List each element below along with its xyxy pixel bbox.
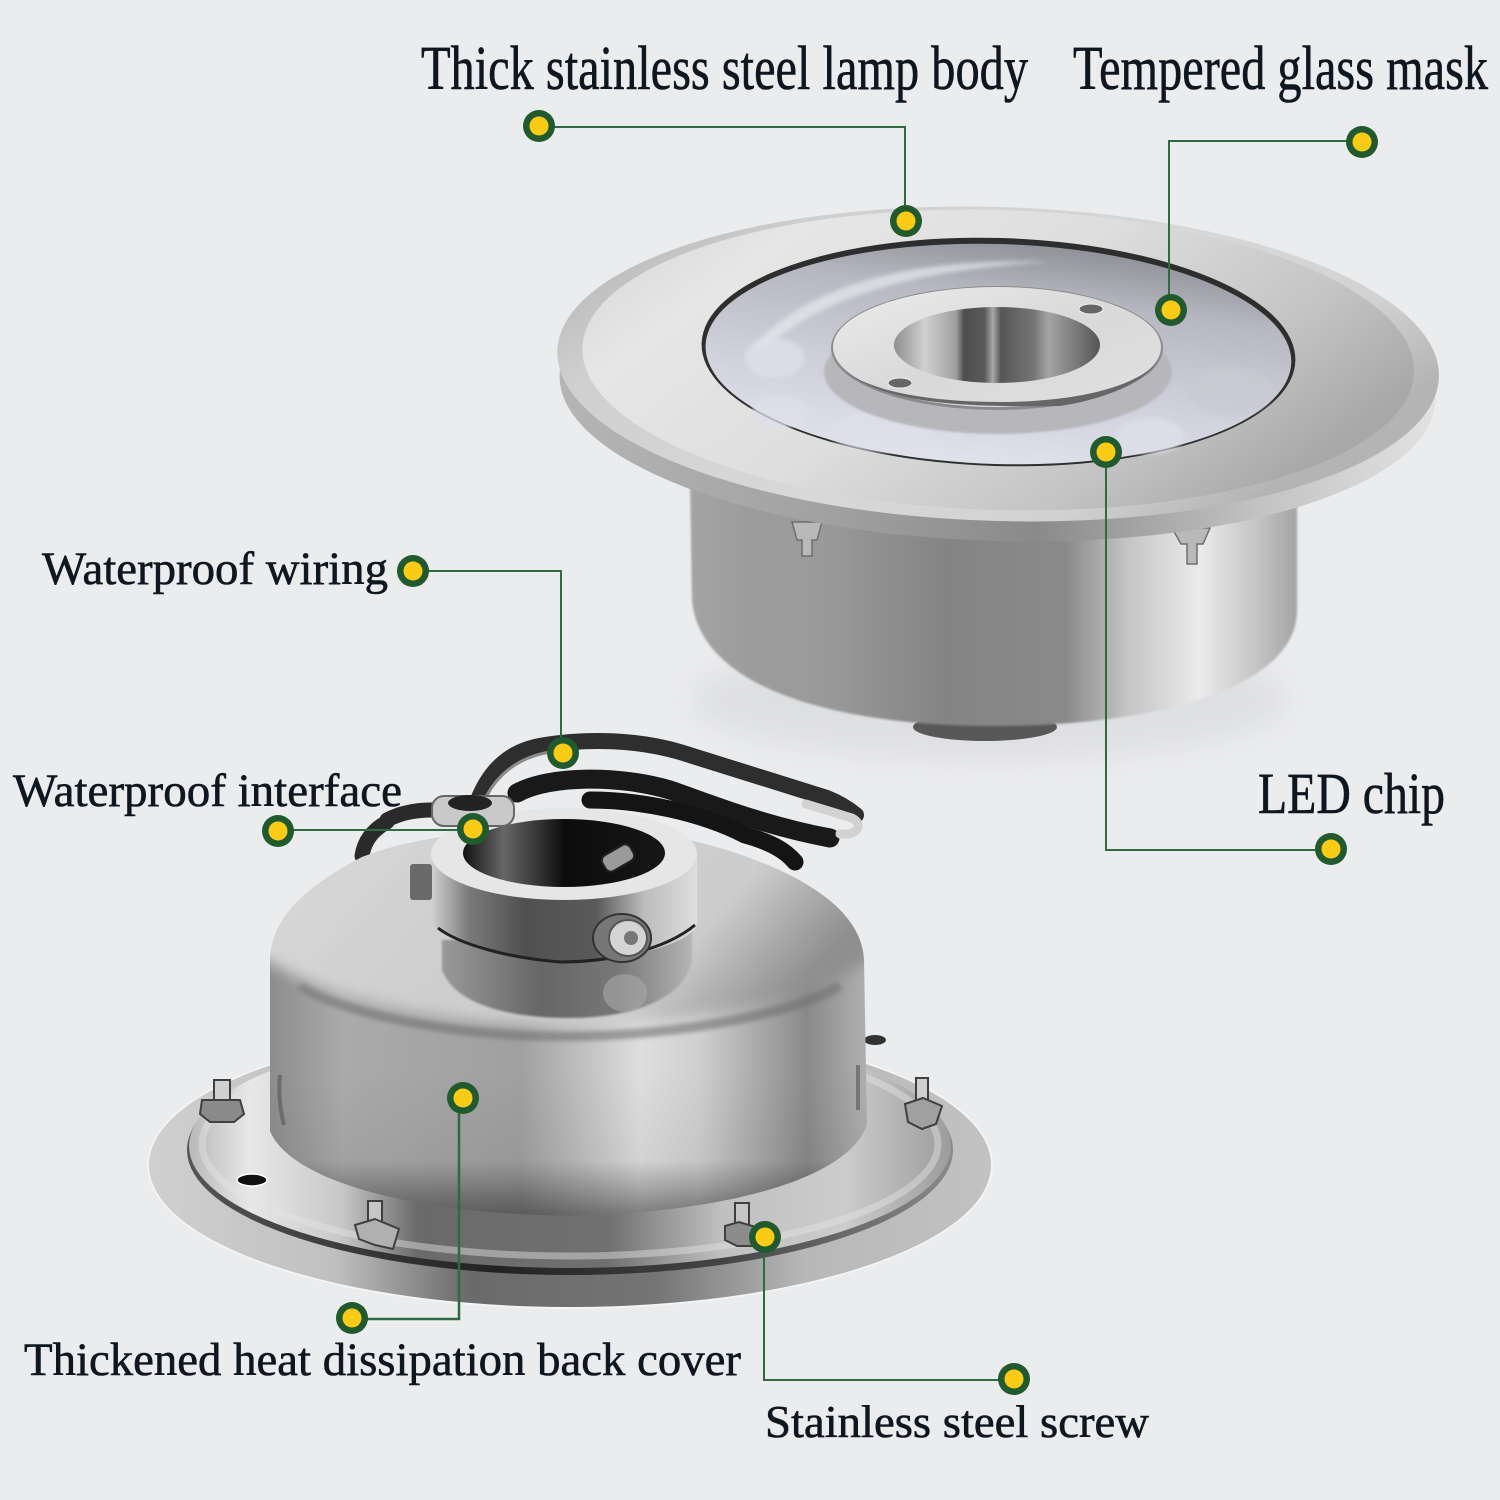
marker: interface bbox=[457, 813, 489, 845]
label: back cover: Thickened heat dissipation back cover bbox=[24, 1334, 741, 1386]
marker: screw bbox=[749, 1221, 781, 1253]
marker: LED chip bbox=[1090, 436, 1122, 468]
label: interface: Waterproof interface bbox=[13, 765, 402, 817]
label: LED chip: LED chip bbox=[1258, 761, 1445, 826]
callout line: lamp body bbox=[539, 127, 905, 221]
callout line: LED chip bbox=[1106, 452, 1331, 850]
marker: back cover bbox=[447, 1082, 479, 1114]
bolts bbox=[792, 522, 1210, 564]
marker: wiring start bbox=[397, 555, 429, 587]
product photo: upper lamp front view bbox=[552, 194, 1444, 760]
motor housing bbox=[270, 837, 867, 1216]
label: screw: Stainless steel screw bbox=[765, 1397, 1150, 1447]
product photo: lower lamp back view bbox=[147, 741, 993, 1309]
marker: wiring bbox=[547, 737, 579, 769]
callout line: back cover bbox=[352, 1098, 459, 1319]
callout line: screw bbox=[764, 1237, 1014, 1380]
marker: glass mask bbox=[1155, 294, 1187, 326]
callout line: interface bbox=[278, 829, 473, 831]
marker: back cover end bbox=[336, 1302, 368, 1334]
LED lenses under glass bbox=[745, 338, 1272, 454]
marker: glass mask start bbox=[1346, 126, 1378, 158]
shaft collar and screw bbox=[410, 795, 697, 1018]
callout line: glass mask bbox=[1169, 141, 1362, 310]
marker: LED chip end bbox=[1315, 833, 1347, 865]
callout line: wiring bbox=[413, 571, 561, 753]
flange bolts bbox=[200, 1078, 942, 1249]
marker: interface start bbox=[262, 815, 294, 847]
marker: screw end bbox=[998, 1363, 1030, 1395]
marker: lamp body start bbox=[523, 110, 555, 142]
label: wiring: Waterproof wiring bbox=[42, 543, 388, 595]
label: lamp body: Thick stainless steel lamp body bbox=[421, 35, 1028, 103]
marker: lamp body bbox=[890, 205, 922, 237]
mounting flange bbox=[147, 1021, 993, 1309]
cable bbox=[362, 741, 858, 862]
